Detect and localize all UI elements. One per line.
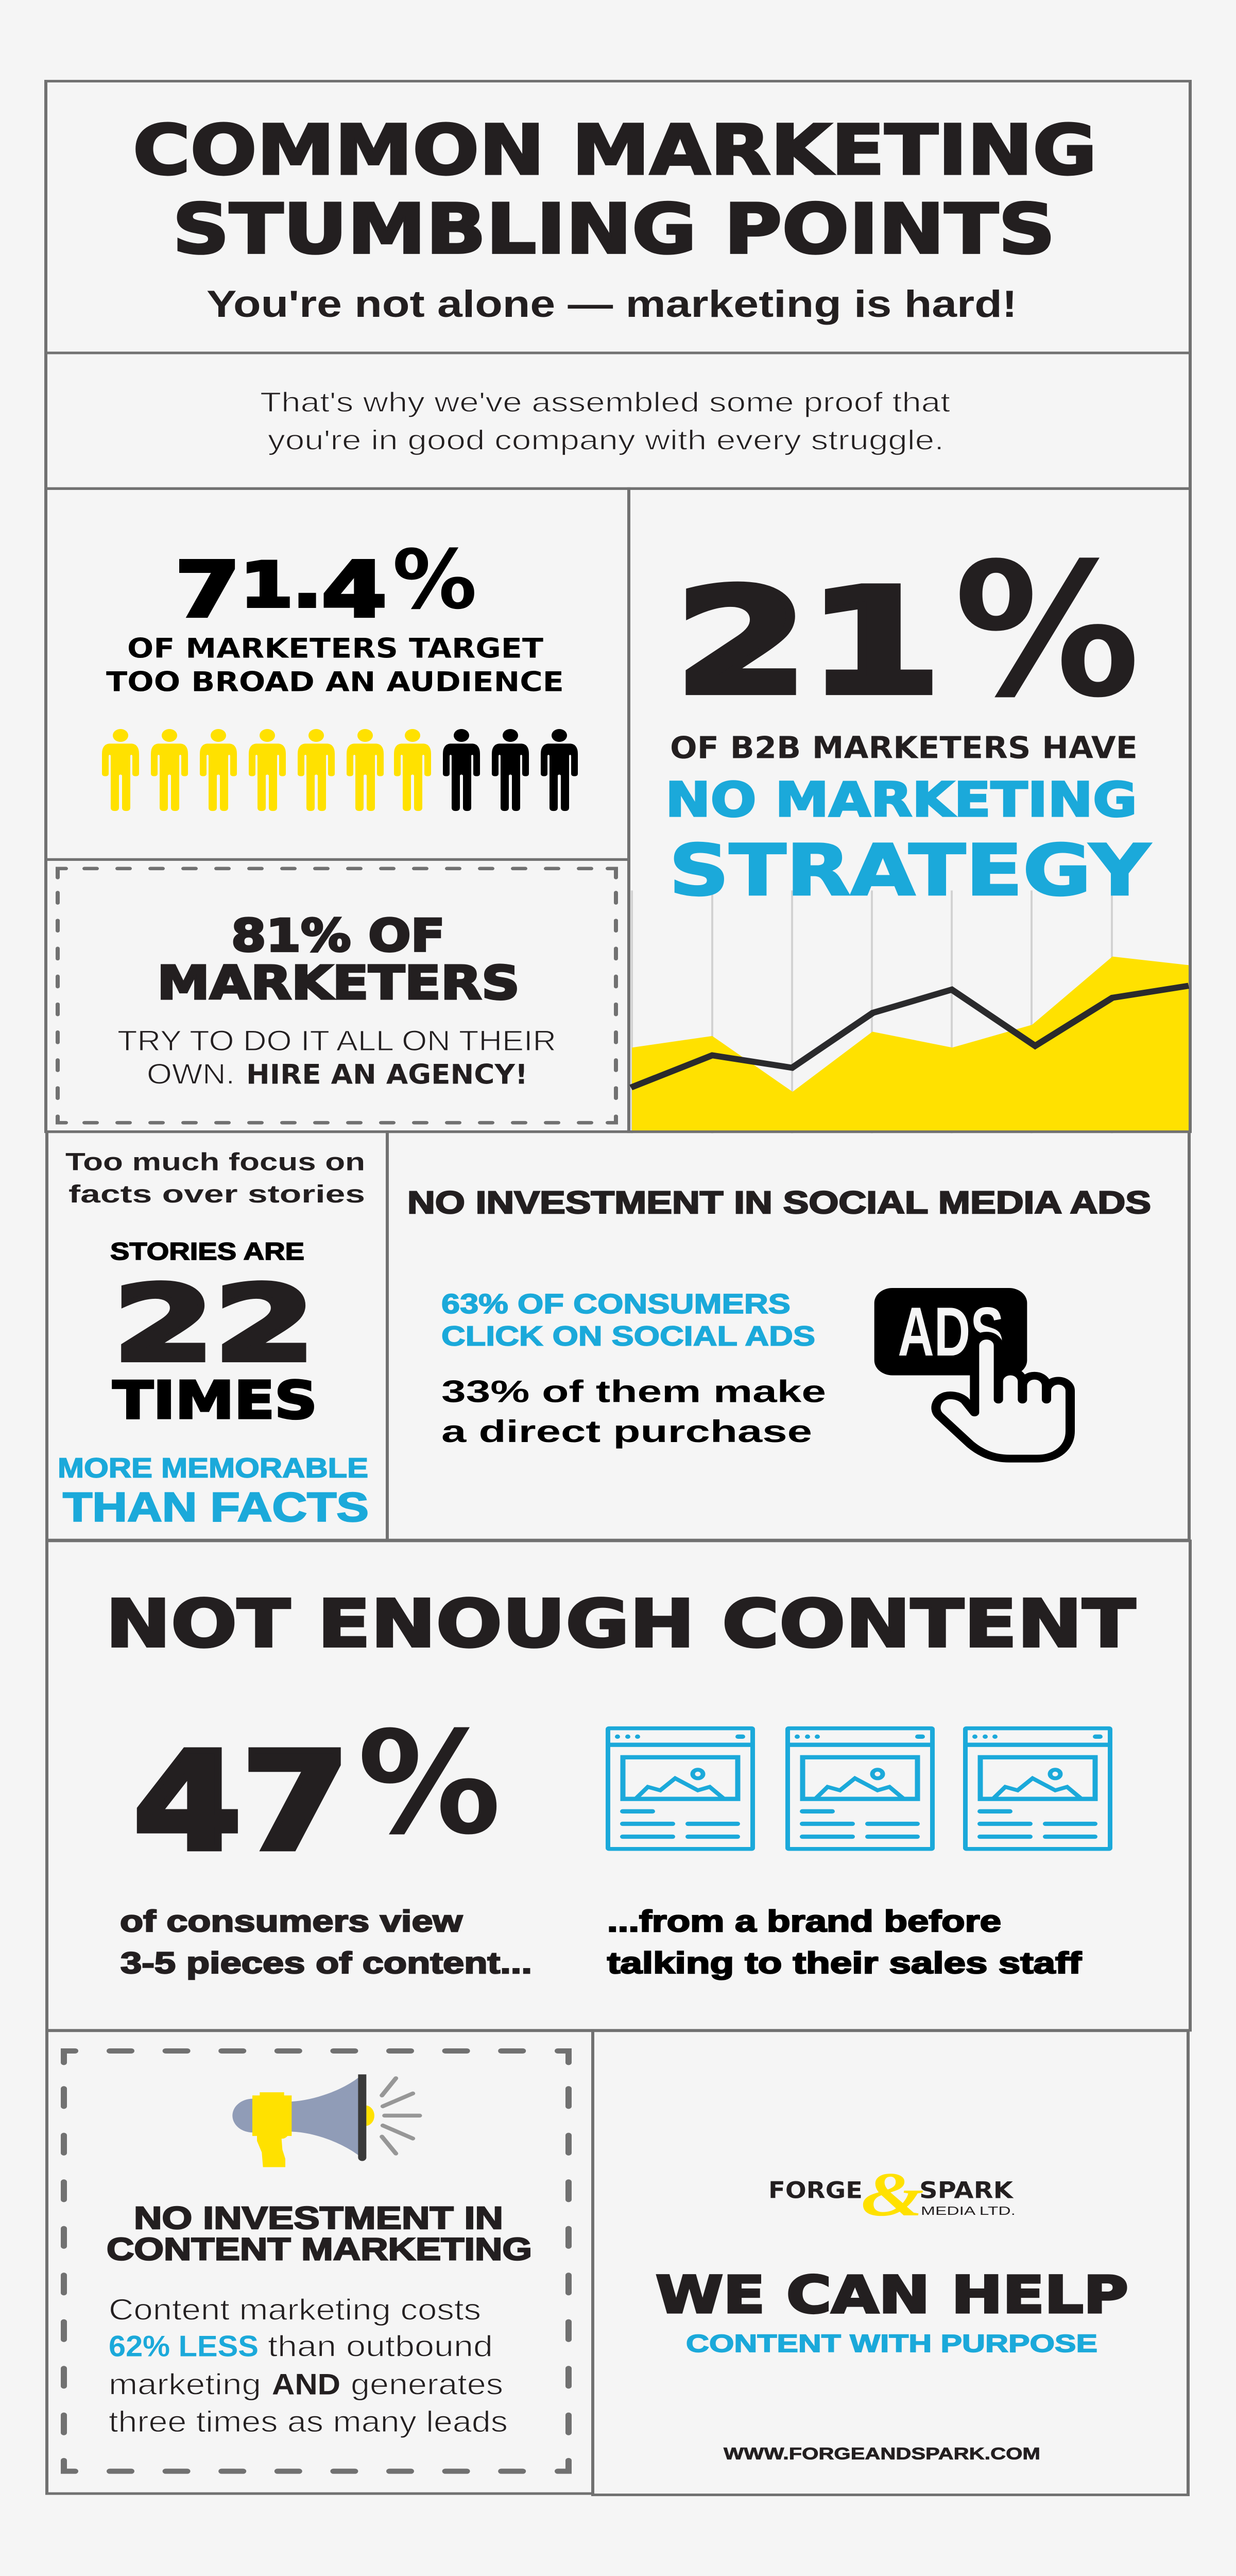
label: more memorable than facts [58, 1453, 369, 1530]
stat: 63% click: 63% OF CONSUMERS [441, 1289, 791, 1319]
body text: than outbound [268, 2330, 493, 2363]
stat: 47% [133, 1701, 501, 1880]
caption: consumers [120, 1905, 532, 1980]
panel heading: NO INVESTMENT IN [134, 2201, 503, 2235]
panel: social media ads [387, 1132, 1189, 1540]
label: more memorable than facts: THAN FACTS [63, 1484, 369, 1530]
panel: not enough content [47, 1541, 1190, 2030]
logo: Forge & Spark Media Ltd.: & [861, 2160, 924, 2229]
panel heading: NOT ENOUGH CONTENT [106, 1586, 1136, 1663]
body text: OWN. [147, 1058, 235, 1090]
caption: consumers: 3-5 pieces of content... [121, 1946, 532, 1980]
panel: content marketing [47, 2031, 593, 2494]
dashed border [64, 2051, 569, 2471]
caption: brand [607, 1905, 1082, 1980]
icon: ten people, seven highlighted [102, 729, 578, 811]
panel: 81% of marketers [46, 859, 629, 1132]
logo: Forge & Spark Media Ltd.: SPARK [919, 2177, 1014, 2204]
body text: marketing [109, 2368, 261, 2401]
body text: generates [351, 2368, 503, 2401]
stat caption: OF MARKETERS TARGET [127, 633, 543, 664]
title [133, 110, 1097, 269]
stat: 33% purchase: 33% of them make [441, 1375, 826, 1409]
highlight: no marketing strategy [665, 772, 1151, 911]
stat caption [106, 633, 564, 698]
icon: ads button with pointing hand: ADS [898, 1293, 1004, 1370]
stat: 63% click: CLICK ON SOCIAL ADS [441, 1321, 815, 1351]
website: WWW.FORGEANDSPARK.COM [724, 2444, 1040, 2463]
panel heading: Too much focus on [65, 1148, 365, 1176]
label: more memorable than facts: MORE MEMORABLE [58, 1453, 368, 1483]
panel: facts over stories [47, 1132, 387, 1540]
heading: 81% OF [231, 909, 445, 962]
highlight: no marketing strategy: STRATEGY [669, 829, 1151, 911]
stat: 71.4%: 4 [321, 546, 387, 634]
chart: area and line [631, 890, 1189, 1133]
stat: 71.4%: 1. [241, 550, 321, 621]
stat: 33% purchase [441, 1375, 826, 1449]
heading [157, 909, 520, 1010]
stat: 21%: 21 [675, 558, 941, 726]
body text: HIRE AN AGENCY! [246, 1058, 528, 1090]
body text: TRY TO DO IT ALL ON THEIR [117, 1025, 556, 1057]
stat: 71.4%: % [392, 533, 477, 628]
call to action: WE CAN HELP [656, 2265, 1128, 2325]
panel: we can help [593, 2031, 1188, 2495]
stat: 63% click [441, 1289, 815, 1351]
intro text: you're in good company with every struggle. [268, 425, 944, 455]
icon: ads button with pointing hand [874, 1288, 1070, 1459]
body text [109, 2294, 508, 2438]
panel heading: NO INVESTMENT IN SOCIAL MEDIA ADS [407, 1185, 1151, 1221]
icons: three web pages [608, 1728, 1110, 1849]
stat: 47%: % [357, 1701, 501, 1866]
stat: 21% [675, 524, 1140, 738]
panel: intro [46, 353, 1190, 488]
stat: 71.4% [175, 533, 477, 634]
panel: header [46, 81, 1190, 353]
panel heading [65, 1148, 365, 1208]
logo: Forge & Spark Media Ltd.: FORGE [768, 2177, 863, 2204]
caption: brand: ...from a brand before [607, 1905, 1001, 1938]
stat: 33% purchase: a direct purchase [441, 1415, 812, 1449]
body text [117, 1025, 556, 1090]
icon: megaphone [232, 2074, 420, 2167]
panel: 21% no strategy [629, 488, 1190, 1133]
stat caption: TOO BROAD AN AUDIENCE [106, 666, 564, 698]
dashed border [58, 869, 616, 1123]
highlight: no marketing strategy: NO MARKETING [665, 772, 1137, 827]
stat: 22: 22 [113, 1264, 315, 1384]
body text: AND [272, 2368, 340, 2401]
tagline: CONTENT WITH PURPOSE [686, 2330, 1097, 2358]
label: stories are: STORIES ARE [110, 1238, 304, 1265]
body text: Content marketing costs [109, 2294, 481, 2326]
title: COMMON MARKETING [133, 110, 1097, 190]
body text: 62% LESS [109, 2330, 259, 2363]
body text: three times as many leads [109, 2405, 508, 2438]
panel heading: facts over stories [68, 1181, 365, 1208]
stat: 21%: % [954, 524, 1140, 738]
stat: 71.4%: 7 [175, 546, 238, 634]
logo: Forge & Spark Media Ltd. [768, 2160, 1016, 2229]
panel heading [107, 2201, 532, 2267]
intro text [260, 386, 950, 455]
heading: MARKETERS [157, 957, 520, 1010]
logo: Forge & Spark Media Ltd.: MEDIA LTD. [921, 2205, 1016, 2218]
stat: 47%: 47 [133, 1724, 350, 1880]
caption: consumers: of consumers view [120, 1905, 463, 1938]
title: STUMBLING POINTS [173, 189, 1055, 269]
caption: brand: talking to their sales staff [607, 1946, 1082, 1980]
label: times: TIMES [113, 1370, 317, 1431]
stat caption: OF B2B MARKETERS HAVE [670, 730, 1138, 766]
panel heading: CONTENT MARKETING [107, 2232, 532, 2267]
subtitle: You're not alone — marketing is hard! [207, 283, 1017, 325]
intro text: That's why we've assembled some proof that [260, 386, 950, 418]
panel: 71.4% audience stat [46, 488, 629, 859]
